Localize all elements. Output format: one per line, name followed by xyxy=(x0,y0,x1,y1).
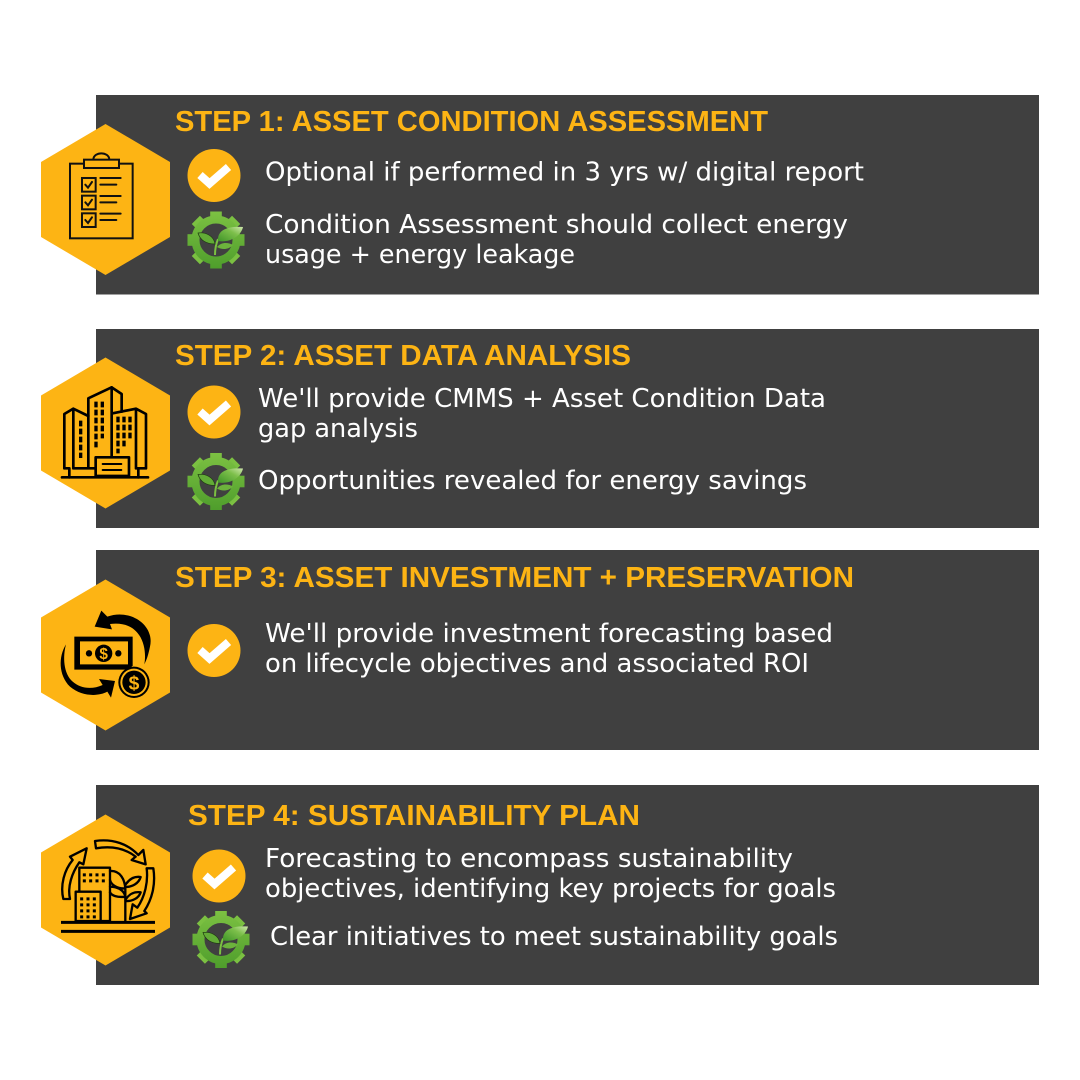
text: cmms: We'll provide CMMS + Asset Condition Data xyxy=(258,384,826,414)
dollar sign on bill: $ xyxy=(99,646,108,663)
icon: check xyxy=(188,386,240,438)
heading: step 4: STEP 4: SUSTAINABILITY PLAN xyxy=(188,800,640,832)
panel: step 1 xyxy=(41,95,1039,294)
heading: step 1: STEP 1: ASSET CONDITION ASSESSMENT xyxy=(175,106,768,138)
icon: green gear xyxy=(188,453,244,510)
icon: check xyxy=(188,624,240,677)
hexagon: step 2 xyxy=(41,358,170,508)
text: usage: usage + energy leakage xyxy=(265,240,575,270)
icon: sustainable buildings xyxy=(61,840,155,931)
panel: step 3 xyxy=(41,550,1039,750)
hexagon: step 1 xyxy=(41,124,170,275)
panel: step 2 xyxy=(41,329,1039,528)
text: objectives: objectives, identifying key projects for goals xyxy=(265,874,836,904)
text: clear initiatives: Clear initiatives to meet sustainability goals xyxy=(270,922,838,952)
heading: step 2: STEP 2: ASSET DATA ANALYSIS xyxy=(175,340,631,372)
icon: office buildings xyxy=(62,387,148,477)
icon: clipboard checklist xyxy=(70,153,133,238)
text: gap analysis: gap analysis xyxy=(258,414,418,444)
text: lifecycle: on lifecycle objectives and associated ROI xyxy=(265,649,809,679)
icon: check xyxy=(192,850,246,902)
text: investment forecasting: We'll provide investment forecasting based xyxy=(265,619,833,649)
panel: step 4 xyxy=(41,785,1039,985)
hexagon: step 4 xyxy=(41,814,170,966)
icon: check xyxy=(188,149,240,202)
text: optional: Optional if performed in 3 yrs w/ digital report xyxy=(265,158,864,188)
text: opportunities: Opportunities revealed for energy savings xyxy=(258,466,807,496)
hexagon: step 3 xyxy=(41,580,170,730)
text: forecasting: Forecasting to encompass sustainability xyxy=(265,844,793,874)
icon: money cycle xyxy=(61,611,151,698)
heading: step 3: STEP 3: ASSET INVESTMENT + PRESERVATION xyxy=(175,562,854,594)
text: condition assessment: Condition Assessment should collect energy xyxy=(265,210,848,240)
icon: green gear xyxy=(188,212,244,268)
icon: green gear xyxy=(192,911,250,968)
dollar sign on coin: $ xyxy=(129,674,140,695)
